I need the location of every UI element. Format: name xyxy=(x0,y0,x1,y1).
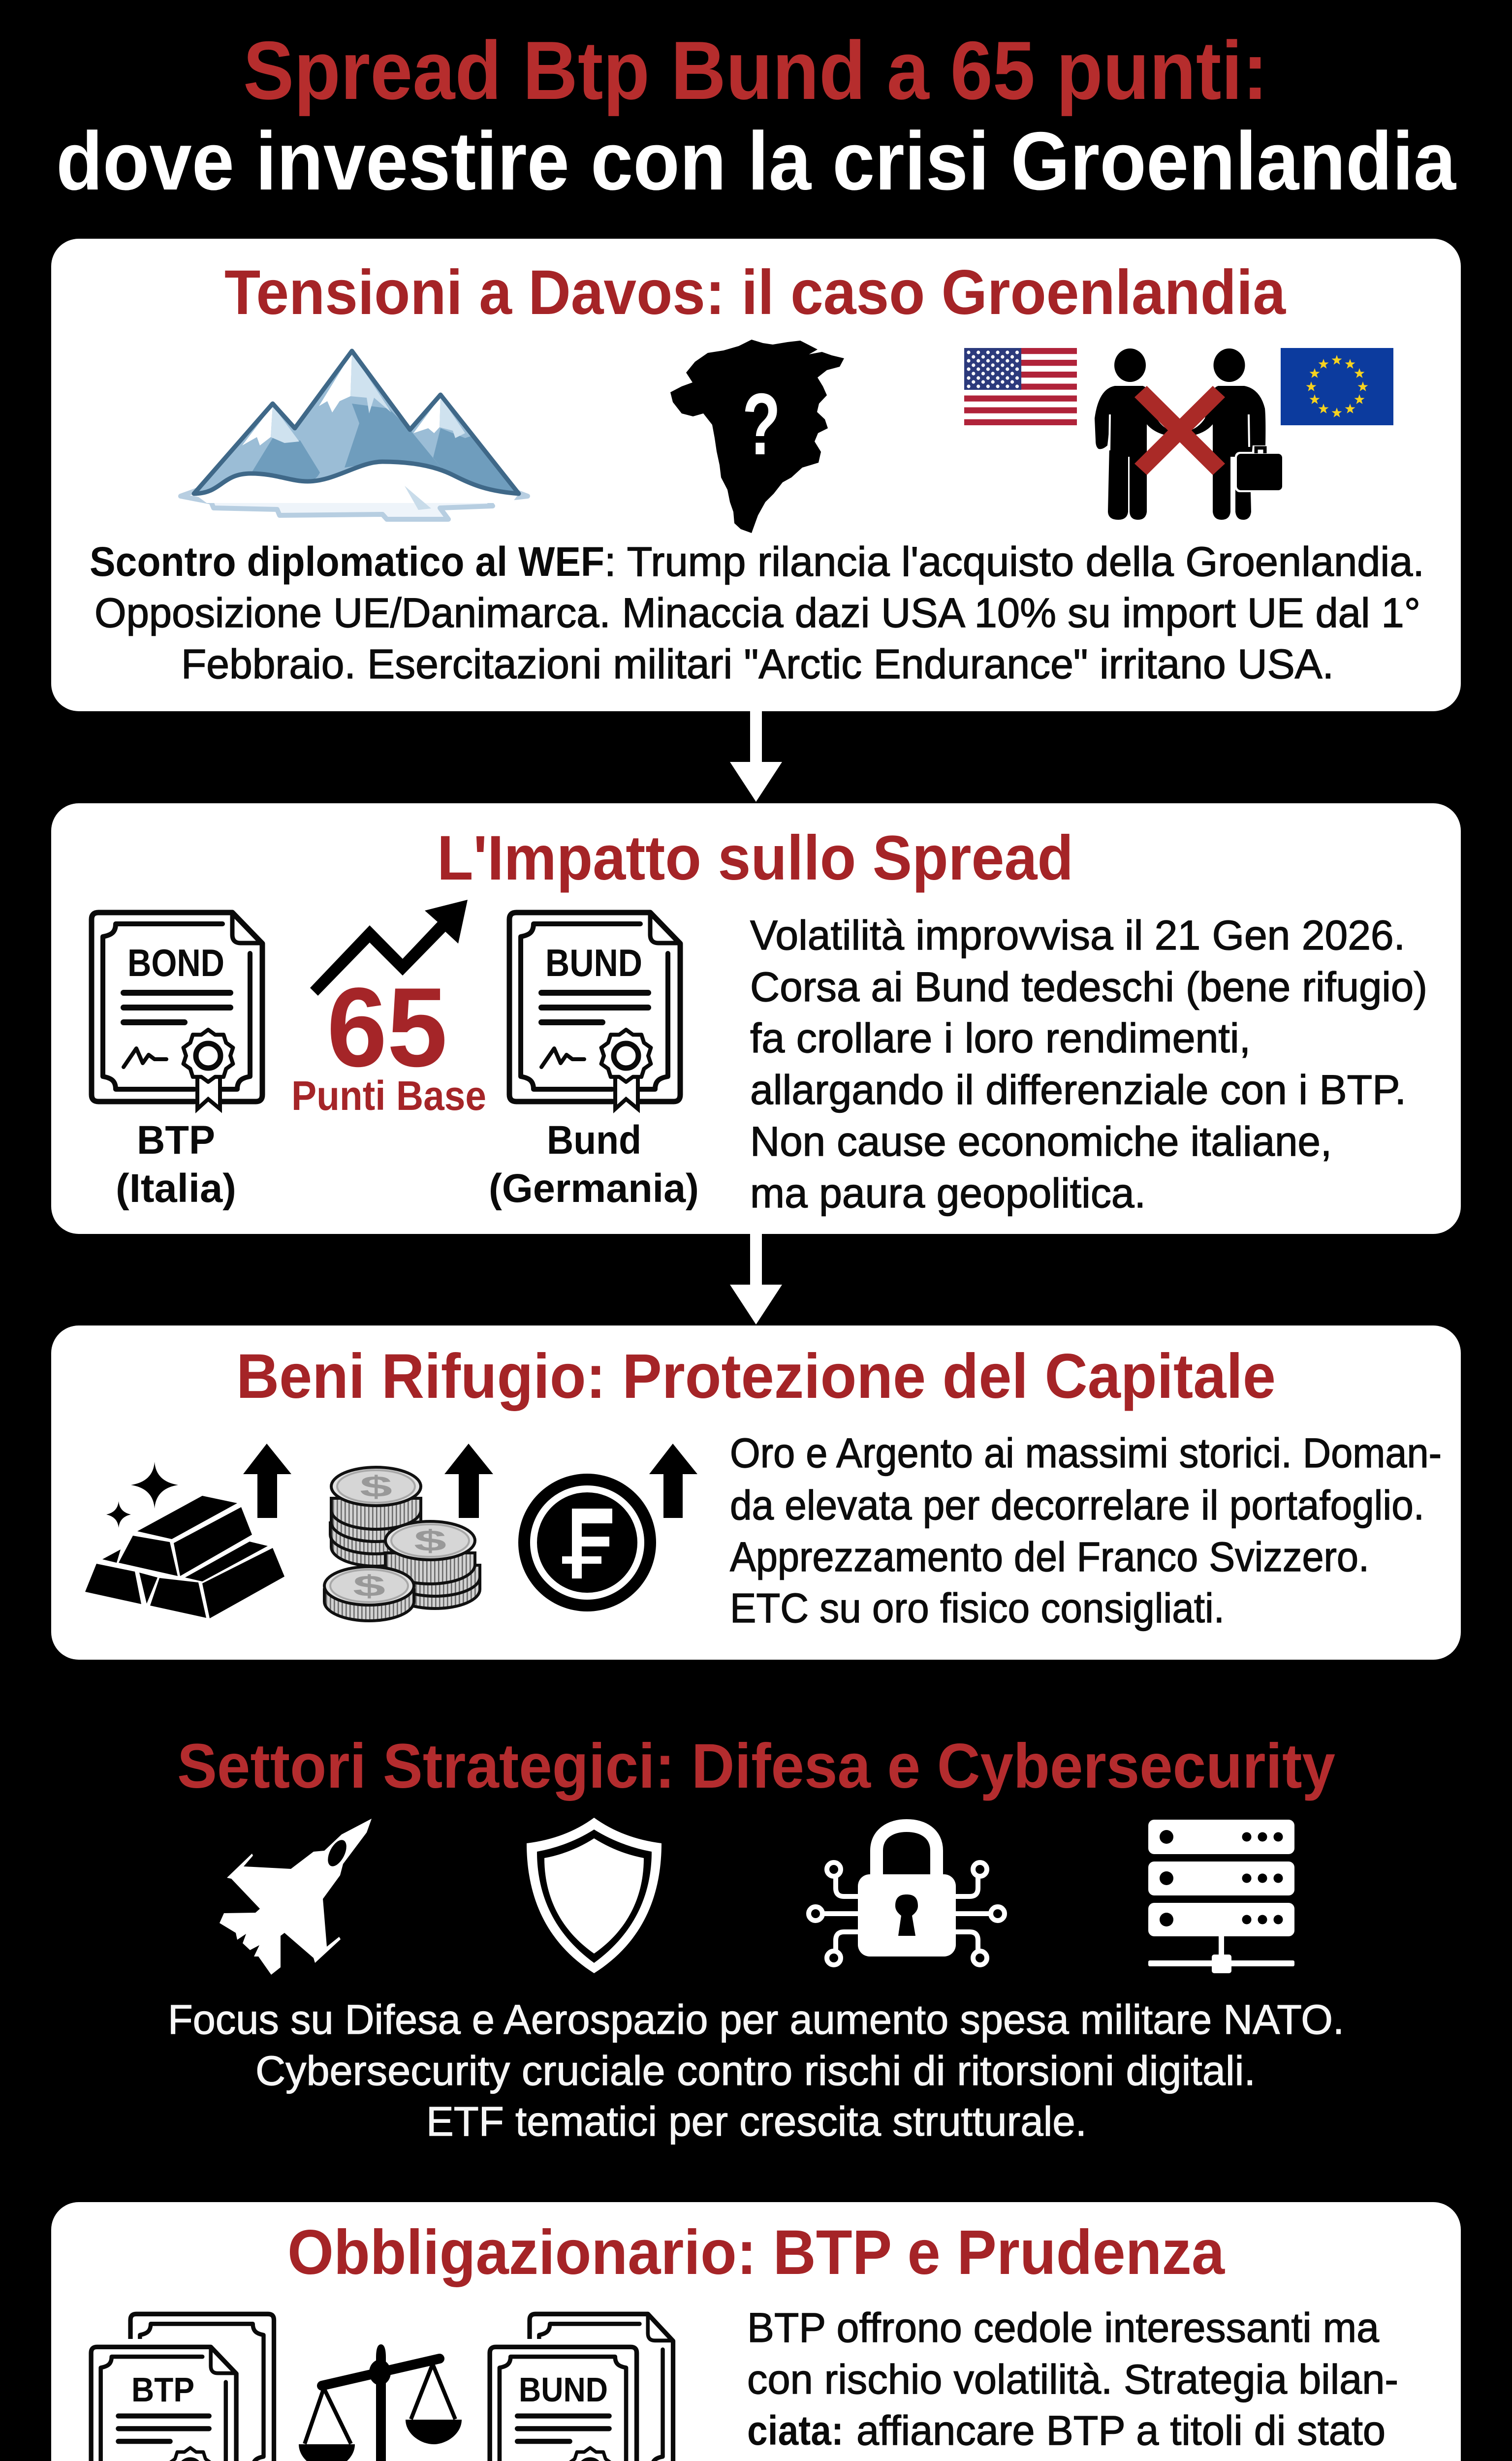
text: defence and cybersecurity: Cybersecurity cruciale contro rischi di ritorsioni digitali. xyxy=(255,2048,1256,2094)
icon: server rack xyxy=(1148,1820,1294,1973)
section: Settori Strategici xyxy=(168,1731,1344,2145)
icon: BTP document stack: BTP xyxy=(131,2370,194,2409)
text: spread explanation: fa crollare i loro rendimenti, xyxy=(750,1015,1251,1061)
icon: EU flag xyxy=(1281,348,1393,425)
text: spread explanation: ma paura geopolitica. xyxy=(750,1170,1146,1216)
text: spread explanation: allargando il differenziale con i BTP. xyxy=(750,1067,1406,1113)
text: safe havens: Apprezzamento del Franco Svizzero. xyxy=(730,1534,1369,1580)
panel: Tensioni a Davos xyxy=(51,239,1461,711)
icon: shield xyxy=(527,1818,662,1973)
arrow: franc up xyxy=(649,1444,697,1518)
icon: Bund document xyxy=(509,913,680,1109)
label: BTP Italia xyxy=(116,1118,236,1211)
text: safe havens: da elevata per decorrelare il portafoglio. xyxy=(730,1482,1424,1528)
arrow: silver up xyxy=(444,1444,493,1518)
icon: diplomatic clash figures xyxy=(1095,348,1283,520)
icon: Greenland silhouette: ? xyxy=(742,375,781,473)
label: Bund Germania xyxy=(489,1118,699,1211)
icon: BTP bond document: BOND xyxy=(127,941,224,984)
label: Punti Base: Punti Base xyxy=(291,1073,486,1119)
heading: Settori Strategici: Settori Strategici: Difesa e Cybersecurity xyxy=(177,1731,1335,1801)
text: bond strategy: ciata: xyxy=(747,2407,844,2454)
icon: BTP document stack xyxy=(83,2314,274,2461)
icon: BTP bond document xyxy=(92,913,262,1109)
icon: Greenland silhouette xyxy=(670,340,844,533)
icon: USA flag xyxy=(964,348,1077,425)
arrow: gold up xyxy=(243,1444,291,1518)
text: diplomatic clash: Scontro diplomatico al WEF xyxy=(90,538,604,585)
panel: L'Impatto sullo Spread xyxy=(51,803,1461,1234)
text: safe havens xyxy=(730,1430,1442,1631)
arrow: Davos to Spread xyxy=(730,711,782,802)
text: bond strategy: con rischio volatilità. Strategia bilan- xyxy=(747,2356,1398,2402)
heading: Tensioni a Davos: Tensioni a Davos: il caso Groenlandia xyxy=(224,257,1286,328)
heading: Beni Rifugio: Beni Rifugio: Protezione del Capitale xyxy=(236,1341,1276,1412)
stat: 65: 65 xyxy=(327,964,447,1090)
heading: Obbligazionario: Obbligazionario: BTP e Prudenza xyxy=(287,2217,1225,2288)
red X xyxy=(1134,386,1225,475)
arrow: Spread to Beni Rifugio xyxy=(730,1234,782,1325)
icon: Swiss franc coin xyxy=(518,1474,656,1611)
text: bond strategy xyxy=(747,2304,1439,2461)
text: defence and cybersecurity: Focus su Difesa e Aerospazio per aumento spesa militare NATO. xyxy=(168,1996,1344,2043)
icon: icy mountains xyxy=(181,351,528,519)
panel: Beni Rifugio xyxy=(51,1325,1461,1660)
title xyxy=(56,24,1456,207)
icon: silver coin stacks xyxy=(324,1467,480,1621)
icon: Bund document stack: BUND xyxy=(519,2370,608,2409)
text: safe havens: Oro e Argento ai massimi storici. Doman- xyxy=(730,1430,1442,1476)
text: bond strategy: affiancare BTP a titoli di stato xyxy=(856,2407,1386,2454)
text: bond strategy: BTP offrono cedole interessanti ma xyxy=(747,2304,1379,2351)
icon: fighter jet xyxy=(220,1819,372,1975)
text: diplomatic clash: : Trump rilancia l'acquisto della Groenlandia. xyxy=(604,538,1424,585)
text: diplomatic clash: Febbraio. Esercitazioni militari "Arctic Endurance" irritano USA. xyxy=(181,641,1334,687)
icon: Bund document stack xyxy=(481,2314,673,2461)
icon: balance scale xyxy=(299,2344,462,2461)
text: diplomatic clash xyxy=(90,538,1424,687)
text: diplomatic clash: Opposizione UE/Danimarca. Minaccia dazi USA 10% su import UE dal 1° xyxy=(94,590,1420,636)
icon: gold bars xyxy=(85,1462,284,1618)
label: BTP Italia: BTP xyxy=(137,1118,215,1163)
icon: Bund document: BUND xyxy=(545,941,642,984)
title line 1: Spread Btp Bund a 65 punti: xyxy=(243,24,1268,117)
icon: digital padlock xyxy=(809,1826,1005,1965)
text: spread explanation: Non cause economiche italiane, xyxy=(750,1118,1332,1165)
text: spread explanation xyxy=(750,912,1427,1216)
label: Bund Germania: (Germania) xyxy=(489,1166,699,1211)
text: spread explanation: Corsa ai Bund tedeschi (bene rifugio) xyxy=(750,964,1427,1010)
label: Bund Germania: Bund xyxy=(547,1118,641,1163)
text: defence and cybersecurity xyxy=(168,1996,1344,2145)
text: spread explanation: Volatilità improvvisa il 21 Gen 2026. xyxy=(750,912,1405,958)
icon: rising trend arrow xyxy=(310,900,468,996)
panel: Obbligazionario xyxy=(51,2202,1461,2461)
heading: L'Impatto sullo Spread: L'Impatto sullo Spread xyxy=(437,823,1073,893)
text: safe havens: ETC su oro fisico consigliati. xyxy=(730,1585,1225,1631)
text: defence and cybersecurity: ETF tematici per crescita strutturale. xyxy=(426,2098,1087,2145)
label: BTP Italia: (Italia) xyxy=(116,1166,236,1211)
